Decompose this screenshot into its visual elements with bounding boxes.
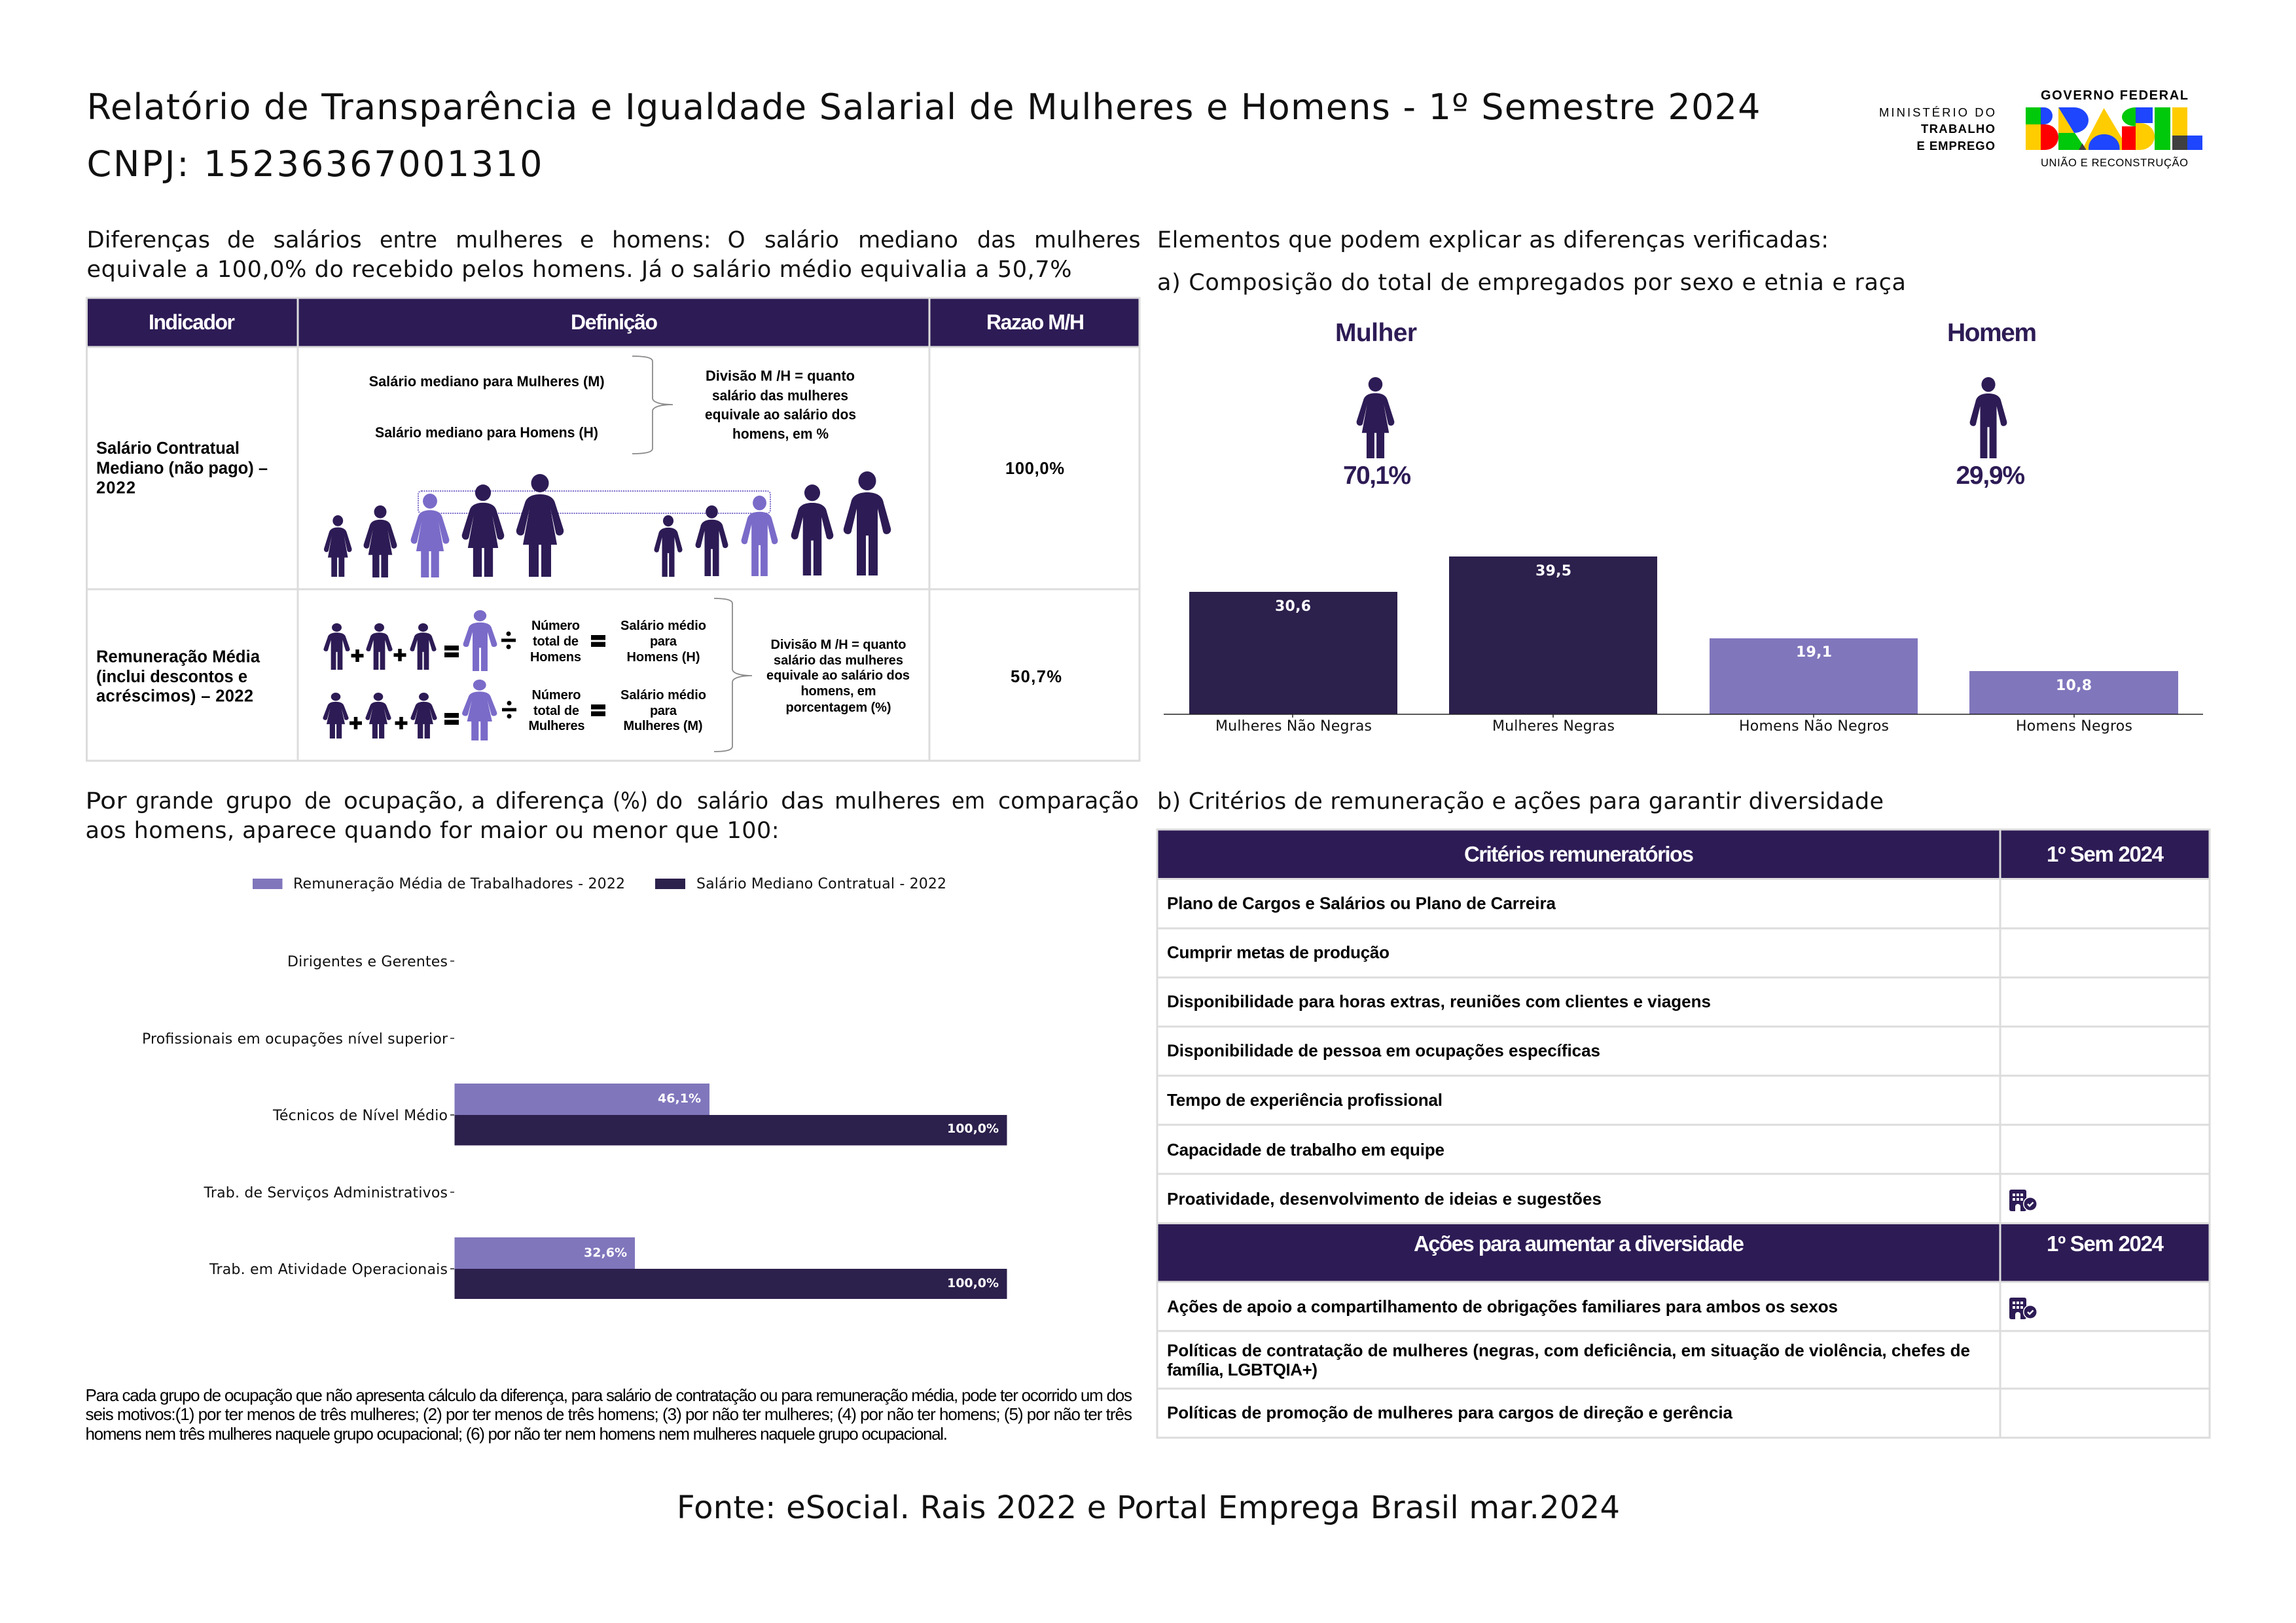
- icon: three women: [323, 693, 437, 739]
- row: remuneração média: Remuneração Média: [96, 648, 260, 666]
- text: diferenças de salários: de: [227, 227, 255, 253]
- icon: woman: [1357, 377, 1394, 458]
- heading: mulher: Mulher: [1335, 319, 1417, 347]
- text: diferenças de salários: mulheres: [1034, 227, 1140, 253]
- bar: mulheres não negras: [1189, 592, 1397, 714]
- text: por grande grupo de ocupação: mulheres: [834, 788, 941, 814]
- text: por grande grupo de ocupação: (%): [613, 788, 648, 814]
- row labels: critérios: Capacidade de trabalho em equipe: [1167, 1140, 1444, 1159]
- row: salário contratual mediano: [96, 439, 268, 498]
- definition: divisão M/H porcentagem: [766, 638, 910, 715]
- text: diferenças de salários: entre: [380, 227, 437, 253]
- definition: divisão M/H: [705, 368, 856, 442]
- text: diferenças de salários: salários: [274, 227, 362, 253]
- definition: divisão M/H: equivale ao salário dos: [705, 407, 856, 423]
- bar: mulheres não negras: 30,6: [1275, 598, 1311, 615]
- header: ações para aumentar a diversidade: [1157, 1224, 2210, 1282]
- table header: [87, 298, 1139, 347]
- row labels: critérios: Cumprir metas de produção: [1167, 943, 1390, 962]
- equation: mulheres: total de: [533, 704, 579, 718]
- equation: homens: para: [650, 634, 677, 649]
- text: diferenças de salários: equivale a 100,0% do recebido pelos homens. Já o salário médio equivalia a 50,7%: [86, 257, 1072, 283]
- text: diferenças de salários: mulheres: [456, 227, 563, 253]
- table header: Razao M/H: [986, 310, 1085, 334]
- panel: tabela critérios e ações: [1157, 830, 2210, 1438]
- axis labels: Trab. em Atividade Operacionais: [209, 1262, 448, 1278]
- bars: trab. em atividade operacionais: [454, 1237, 1007, 1299]
- text: diferenças de salários: homens:: [612, 227, 711, 253]
- table header: Indicador: [149, 310, 235, 334]
- brace: [632, 356, 673, 454]
- bar: mulheres negras: 39,5: [1535, 563, 1571, 579]
- logo text: ministério: MINISTÉRIO DO: [1879, 105, 1995, 119]
- icon: man: [1970, 377, 2007, 458]
- row labels: critérios: Disponibilidade de pessoa em ocupações específicas: [1167, 1041, 1600, 1061]
- panel: tabela indicador definição razão: [86, 298, 1139, 761]
- text: por grande grupo de ocupação: do: [656, 788, 683, 814]
- equation: mulheres: Mulheres: [529, 719, 585, 733]
- text: diferenças de salários: salário: [764, 227, 839, 253]
- icon: building with check: [2009, 1298, 2037, 1319]
- definition: salário mediano: Salário mediano para Mulheres (M): [369, 373, 605, 390]
- header: ações para aumentar a diversidade: Ações para aumentar a diversidade: [1414, 1231, 1744, 1256]
- bars: trab. em atividade operacionais: 32,6%: [584, 1245, 627, 1260]
- legend: Remuneração Média de Trabalhadores - 2022: [293, 876, 625, 892]
- legend: [253, 876, 946, 892]
- text: diferenças de salários: e: [580, 227, 594, 253]
- row labels: critérios: Proatividade, desenvolvimento de ideias e sugestões: [1167, 1189, 1602, 1209]
- text: por grande grupo de ocupação: Por: [85, 788, 127, 814]
- equation: homens: [323, 610, 706, 671]
- row: salário contratual mediano: Salário Contratual: [96, 439, 240, 458]
- logo text: ministério: E EMPREGO: [1916, 139, 1995, 153]
- bar: homens não negros: 19,1: [1796, 644, 1832, 661]
- bar: homens não negros: [1710, 638, 1918, 714]
- text: por grande grupo de ocupação: em: [952, 788, 985, 814]
- definition: divisão M/H porcentagem: Divisão M /H = quanto: [771, 638, 906, 652]
- equation: homens: total de: [533, 634, 579, 649]
- legend: Salário Mediano Contratual - 2022: [696, 876, 946, 892]
- axis labels: Profissionais em ocupações nível superior: [142, 1031, 448, 1048]
- text: por grande grupo de ocupação: diferença: [495, 788, 605, 814]
- footnote: Para cada grupo de ocupação que não apresenta cálculo da diferença, para salário de contratação ou para remuneração média, pode ter ocorrido um dos: [85, 1385, 1132, 1405]
- definition: divisão M/H porcentagem: salário das mulheres: [774, 653, 903, 668]
- heading: a) composição: a) Composição do total de empregados por sexo e etnia e raça: [1157, 270, 1906, 296]
- row: remuneração média: acréscimos) – 2022: [96, 687, 253, 706]
- bars: trab. em atividade operacionais: 100,0%: [947, 1276, 999, 1290]
- value: 100,0%: 100,0%: [1005, 460, 1064, 478]
- definition: divisão M/H: Divisão M /H = quanto: [706, 368, 855, 384]
- header: critérios remuneratórios: [1157, 830, 2210, 879]
- axis labels: Homens Não Negros: [1739, 718, 1889, 735]
- logo text: ministério: [1879, 105, 1995, 153]
- definition: salário mediano: Salário mediano para Homens (H): [375, 424, 598, 441]
- text: por grande grupo de ocupação: [85, 788, 1139, 844]
- bar: mulheres negras: [1449, 556, 1657, 714]
- row labels: ações: Políticas de promoção de mulheres para cargos de direção e gerência: [1167, 1402, 1733, 1422]
- bars: técnicos de nível médio: 100,0%: [947, 1122, 999, 1136]
- text: por grande grupo de ocupação: salário: [697, 788, 768, 814]
- value: 29,9%: 29,9%: [1956, 462, 2025, 490]
- bar: homens negros: 10,8: [2056, 678, 2092, 694]
- operators: [351, 649, 406, 662]
- title: [86, 86, 1761, 185]
- source note: Fonte: eSocial. Rais 2022 e Portal Emprega Brasil mar.2024: [677, 1489, 1620, 1526]
- row labels: ações: Políticas de contratação de mulheres (negras, com deficiência, em situação de violência, chefes de: [1167, 1341, 1970, 1360]
- logo text: ministério: TRABALHO: [1921, 122, 1995, 136]
- bar chart: grupo de ocupação: [142, 876, 1007, 1299]
- text: por grande grupo de ocupação: comparação: [998, 788, 1139, 814]
- icon: dotted connector box: [418, 491, 770, 513]
- header: critérios remuneratórios: Critérios remuneratórios: [1464, 842, 1694, 866]
- text: por grande grupo de ocupação: grande: [135, 788, 213, 814]
- equation: homens: Número: [531, 619, 580, 633]
- axis labels: Técnicos de Nível Médio: [272, 1108, 448, 1124]
- header: ações para aumentar a diversidade: 1º Sem 2024: [2047, 1231, 2164, 1256]
- equation: homens: Homens (H): [627, 650, 700, 665]
- text: por grande grupo de ocupação: ocupação,: [344, 788, 464, 814]
- axis labels: [1215, 718, 2132, 735]
- header: critérios remuneratórios: 1º Sem 2024: [2047, 842, 2164, 866]
- equation: mulheres: Número: [531, 688, 581, 702]
- row labels: critérios: [1167, 893, 1711, 1209]
- icon: three men: [323, 623, 437, 670]
- icon: five men: [654, 471, 891, 577]
- row labels: ações: Ações de apoio a compartilhamento de obrigações familiares para ambos os sexos: [1167, 1296, 1838, 1316]
- table header: Definição: [571, 310, 658, 334]
- definition: divisão M/H: homens, em %: [732, 426, 829, 442]
- brace: [714, 598, 752, 752]
- text: diferenças de salários: das: [977, 227, 1016, 253]
- axis labels: Homens Negros: [2016, 718, 2132, 735]
- text: por grande grupo de ocupação: aos homens, aparece quando for maior ou menor que 100:: [85, 818, 779, 844]
- definition: divisão M/H porcentagem: porcentagem (%): [785, 701, 891, 715]
- footnote: [85, 1385, 1132, 1444]
- heading: elementos que podem explicar: Elementos que podem explicar as diferenças verificadas:: [1157, 227, 1829, 253]
- row labels: critérios: Plano de Cargos e Salários ou Plano de Carreira: [1167, 893, 1556, 913]
- equation: mulheres: para: [650, 704, 677, 718]
- text: por grande grupo de ocupação: grupo: [226, 788, 292, 814]
- equation: homens: Salário médio: [620, 619, 706, 633]
- text: por grande grupo de ocupação: das: [781, 788, 824, 814]
- title: Relatório de Transparência e Igualdade Salarial de Mulheres e Homens - 1º Semestre 2024: [86, 86, 1761, 128]
- heading: homem: Homem: [1947, 319, 2037, 347]
- row labels: ações: [1167, 1296, 1970, 1422]
- text: diferenças de salários: O: [728, 227, 745, 253]
- definition: divisão M/H porcentagem: equivale ao salário dos: [766, 668, 910, 683]
- logo mark: Brasil: [2026, 107, 2202, 150]
- text: diferenças de salários: mediano: [858, 227, 958, 253]
- axis labels: Dirigentes e Gerentes: [287, 954, 448, 970]
- icon: building with check: [2009, 1190, 2037, 1211]
- text: diferenças de salários: Diferenças: [86, 227, 210, 253]
- bar chart: composição sexo e raça: [1164, 556, 2203, 735]
- row labels: critérios: Tempo de experiência profissional: [1167, 1090, 1443, 1110]
- row: remuneração média: (inclui descontos e: [96, 668, 247, 686]
- definition: divisão M/H porcentagem: homens, em: [801, 684, 876, 699]
- row: salário contratual mediano: 2022: [96, 479, 135, 498]
- footnote: seis motivos:(1) por ter menos de três mulheres; (2) por ter menos de três homens; (3) por não ter mulheres; (4) por não ter homens; (5) por não ter três: [85, 1404, 1132, 1424]
- axis labels: Mulheres Não Negras: [1215, 718, 1372, 735]
- logo text: união e reconstrução: UNIÃO E RECONSTRUÇÃO: [2041, 156, 2188, 169]
- equation: mulheres: Salário médio: [620, 688, 706, 702]
- logo text: governo federal: GOVERNO FEDERAL: [2041, 88, 2188, 103]
- equation: homens: Homens: [530, 650, 581, 665]
- title: CNPJ: 15236367001310: [86, 143, 542, 185]
- definition: salário mediano: [369, 356, 856, 454]
- heading: b) critérios: b) Critérios de remuneração e ações para garantir diversidade: [1157, 788, 1884, 814]
- bars: técnicos de nível médio: [454, 1084, 1007, 1146]
- value: 50,7%: 50,7%: [1011, 668, 1062, 686]
- equation: mulheres: [323, 680, 706, 740]
- logo: ministério do trabalho e emprego, governo federal: [1879, 88, 2202, 169]
- row labels: ações: família, LGBTQIA+): [1167, 1360, 1318, 1379]
- bars: técnicos de nível médio: 46,1%: [658, 1091, 701, 1106]
- definition: divisão M/H: salário das mulheres: [712, 388, 848, 404]
- icon: five women: [324, 474, 564, 577]
- bar: homens negros: [1969, 671, 2178, 714]
- operators: [350, 717, 407, 729]
- row labels: critérios: Disponibilidade para horas extras, reuniões com clientes e viagens: [1167, 991, 1711, 1011]
- row: remuneração média: [96, 648, 260, 706]
- text: por grande grupo de ocupação: a: [471, 788, 485, 814]
- footnote: homens nem três mulheres naquele grupo ocupacional; (6) por não ter nem homens nem mulheres naquele grupo ocupacional.: [85, 1424, 948, 1444]
- axis labels: [142, 954, 448, 1278]
- panel: composição por sexo: [1335, 319, 2037, 490]
- axis labels: Mulheres Negras: [1492, 718, 1615, 735]
- text: diferenças de salários: [86, 227, 1140, 283]
- axis labels: Trab. de Serviços Administrativos: [203, 1185, 448, 1201]
- value: 70,1%: 70,1%: [1343, 462, 1411, 490]
- equation: mulheres: Mulheres (M): [623, 719, 703, 733]
- row: salário contratual mediano: Mediano (não pago) –: [96, 460, 268, 478]
- text: por grande grupo de ocupação: de: [304, 788, 331, 814]
